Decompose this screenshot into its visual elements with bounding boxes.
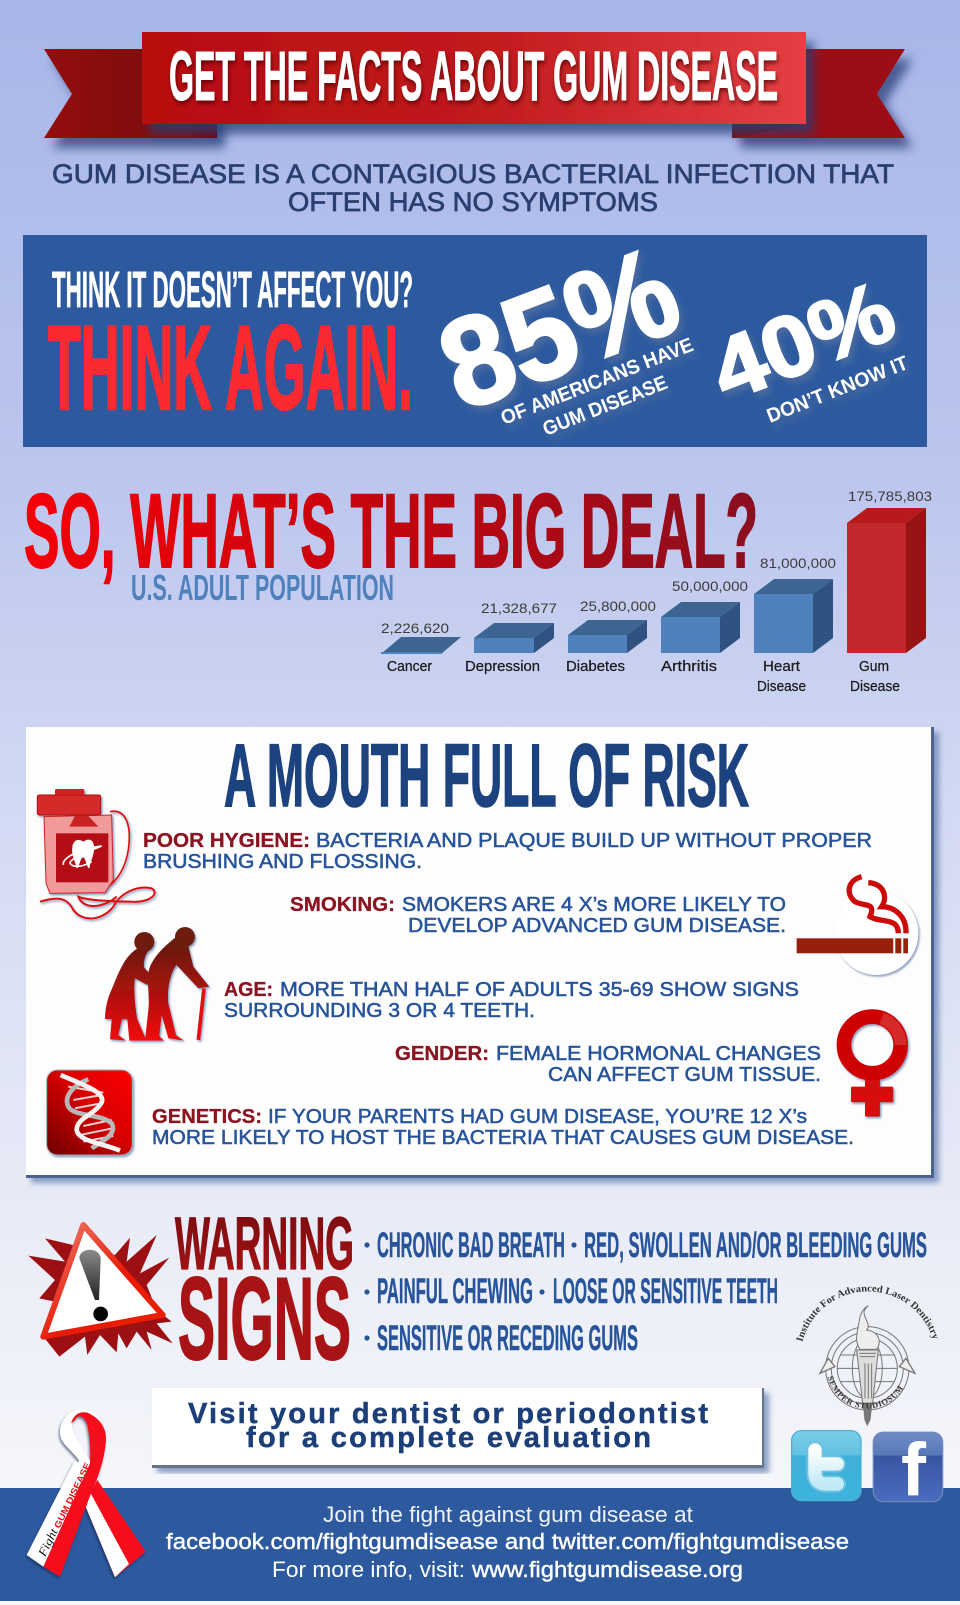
footer text: For more info, visit: xyxy=(272,1557,465,1582)
bar: heart disease: 81,000,000 xyxy=(760,555,836,571)
chart subtitle: U.S. ADULT POPULATION xyxy=(131,567,394,608)
panel: think again statistics xyxy=(23,219,927,447)
risk: gender xyxy=(395,1042,821,1086)
icon: female symbol xyxy=(844,1017,901,1117)
stat: 85 percent: 85% xyxy=(421,219,697,437)
seal: institute for advanced laser dentistry: SEMPER STUDIOSUM xyxy=(828,1376,903,1409)
seal: institute for advanced laser dentistry: Institute For Advanced Laser Dentistry xyxy=(796,1286,938,1342)
warning signs list: CHRONIC BAD BREATH xyxy=(377,1226,565,1265)
risk: genetics: GENETICS: xyxy=(152,1105,262,1128)
icon: warning triangle xyxy=(28,1225,173,1357)
bar: diabetes: Diabetes xyxy=(566,659,625,675)
panel: think again statistics: THINK AGAIN. xyxy=(48,301,413,435)
text: SIGNS xyxy=(178,1253,351,1384)
bar: arthritis: Arthritis xyxy=(661,659,717,675)
footer text xyxy=(166,1502,849,1582)
bar: depression xyxy=(465,600,557,675)
heading: warning signs: WARNING xyxy=(175,1202,354,1285)
bar: heart disease: Heart xyxy=(763,659,800,675)
stat: 85 percent: OF AMERICANS HAVE xyxy=(498,334,697,430)
icon: twitter xyxy=(792,1431,861,1501)
risk: smoking: SMOKERS ARE 4 X’s MORE LIKELY TO xyxy=(402,893,786,916)
icon: awareness ribbon: Fight xyxy=(35,1525,61,1560)
panel: think again statistics: THINK IT DOESN’T AFFECT YOU? xyxy=(52,261,413,318)
risk: gender: FEMALE HORMONAL CHANGES xyxy=(496,1042,821,1065)
bar: heart disease xyxy=(754,555,836,695)
icon: facebook xyxy=(873,1428,943,1512)
footer band xyxy=(0,1488,960,1601)
risk: age: AGE: xyxy=(224,978,273,1001)
icon: awareness ribbon: GUM DISEASE xyxy=(52,1461,93,1530)
bar: gum disease xyxy=(847,488,932,695)
risk: poor hygiene: BRUSHING AND FLOSSING. xyxy=(143,850,422,873)
risk: smoking: DEVELOP ADVANCED GUM DISEASE. xyxy=(408,914,786,937)
bar: cancer: 2,226,620 xyxy=(381,620,449,636)
warning signs list: SENSITIVE OR RECEDING GUMS xyxy=(377,1319,638,1358)
footer text: facebook.com/fightgumdisease and twitter.com/fightgumdisease xyxy=(166,1529,849,1554)
risk: gender: CAN AFFECT GUM TISSUE. xyxy=(548,1063,821,1086)
risk: poor hygiene xyxy=(143,829,872,873)
risk: genetics: IF YOUR PARENTS HAD GUM DISEASE, YOU’RE 12 X’s xyxy=(268,1105,807,1128)
bar: cancer: Cancer xyxy=(387,659,432,675)
bar: heart disease: Disease xyxy=(757,679,806,695)
bar: gum disease: 175,785,803 xyxy=(848,488,932,504)
icon: cigarette xyxy=(797,877,918,975)
risk: smoking: SMOKING: xyxy=(290,893,395,916)
warning signs list: PAINFUL CHEWING xyxy=(377,1272,533,1311)
warning signs list xyxy=(364,1226,927,1358)
bar: gum disease: Gum xyxy=(859,659,889,675)
seal: institute for advanced laser dentistry xyxy=(796,1286,938,1426)
risk: smoking xyxy=(290,893,786,937)
bar: diabetes: 25,800,000 xyxy=(580,598,656,614)
risk: age: MORE THAN HALF OF ADULTS 35-69 SHOW SIGNS xyxy=(280,978,799,1001)
callout: visit your dentist xyxy=(152,1388,764,1468)
callout: visit your dentist: Visit your dentist or periodontist xyxy=(188,1398,708,1430)
risk: poor hygiene: BACTERIA AND PLAQUE BUILD UP WITHOUT PROPER xyxy=(316,829,872,852)
risk: genetics: MORE LIKELY TO HOST THE BACTERIA THAT CAUSES GUM DISEASE. xyxy=(152,1126,854,1149)
icon: dental floss xyxy=(37,789,155,918)
bar: arthritis xyxy=(661,578,748,675)
subtitle: OFTEN HAS NO SYMPTOMS xyxy=(288,187,658,217)
risk: age: SURROUNDING 3 OR 4 TEETH. xyxy=(224,999,535,1022)
bar: gum disease: Disease xyxy=(850,679,900,695)
risk: gender: GENDER: xyxy=(395,1042,489,1065)
stat: 85 percent: GUM DISEASE xyxy=(540,372,671,441)
footer text: www.fightgumdisease.org xyxy=(471,1557,743,1582)
panel: a mouth full of risk xyxy=(26,725,934,1178)
footer text: Join the fight against gum disease at xyxy=(323,1502,693,1527)
subtitle: GUM DISEASE IS A CONTAGIOUS BACTERIAL INFECTION THAT xyxy=(52,159,894,189)
bar: diabetes xyxy=(566,598,656,675)
subtitle xyxy=(52,159,894,217)
stat: 40 percent: DON’T KNOW IT xyxy=(764,352,911,428)
bar: depression: Depression xyxy=(465,659,540,675)
stat: 40 percent: 40% xyxy=(698,263,907,420)
bar: arthritis: 50,000,000 xyxy=(672,578,748,594)
icon: elderly couple xyxy=(105,927,209,1041)
icon: awareness ribbon xyxy=(27,1409,146,1577)
risk: poor hygiene: POOR HYGIENE: xyxy=(143,829,310,852)
heading: warning signs xyxy=(175,1202,354,1384)
bar: depression: 21,328,677 xyxy=(481,600,557,616)
bar: cancer xyxy=(381,620,461,675)
callout: visit your dentist: for a complete evaluation xyxy=(246,1422,651,1454)
risk: age xyxy=(224,978,799,1022)
icon: facebook: f xyxy=(901,1428,927,1512)
bar chart xyxy=(381,488,932,695)
risk: genetics xyxy=(152,1105,854,1149)
icon: dna xyxy=(47,1070,132,1155)
title ribbon banner xyxy=(44,32,905,138)
